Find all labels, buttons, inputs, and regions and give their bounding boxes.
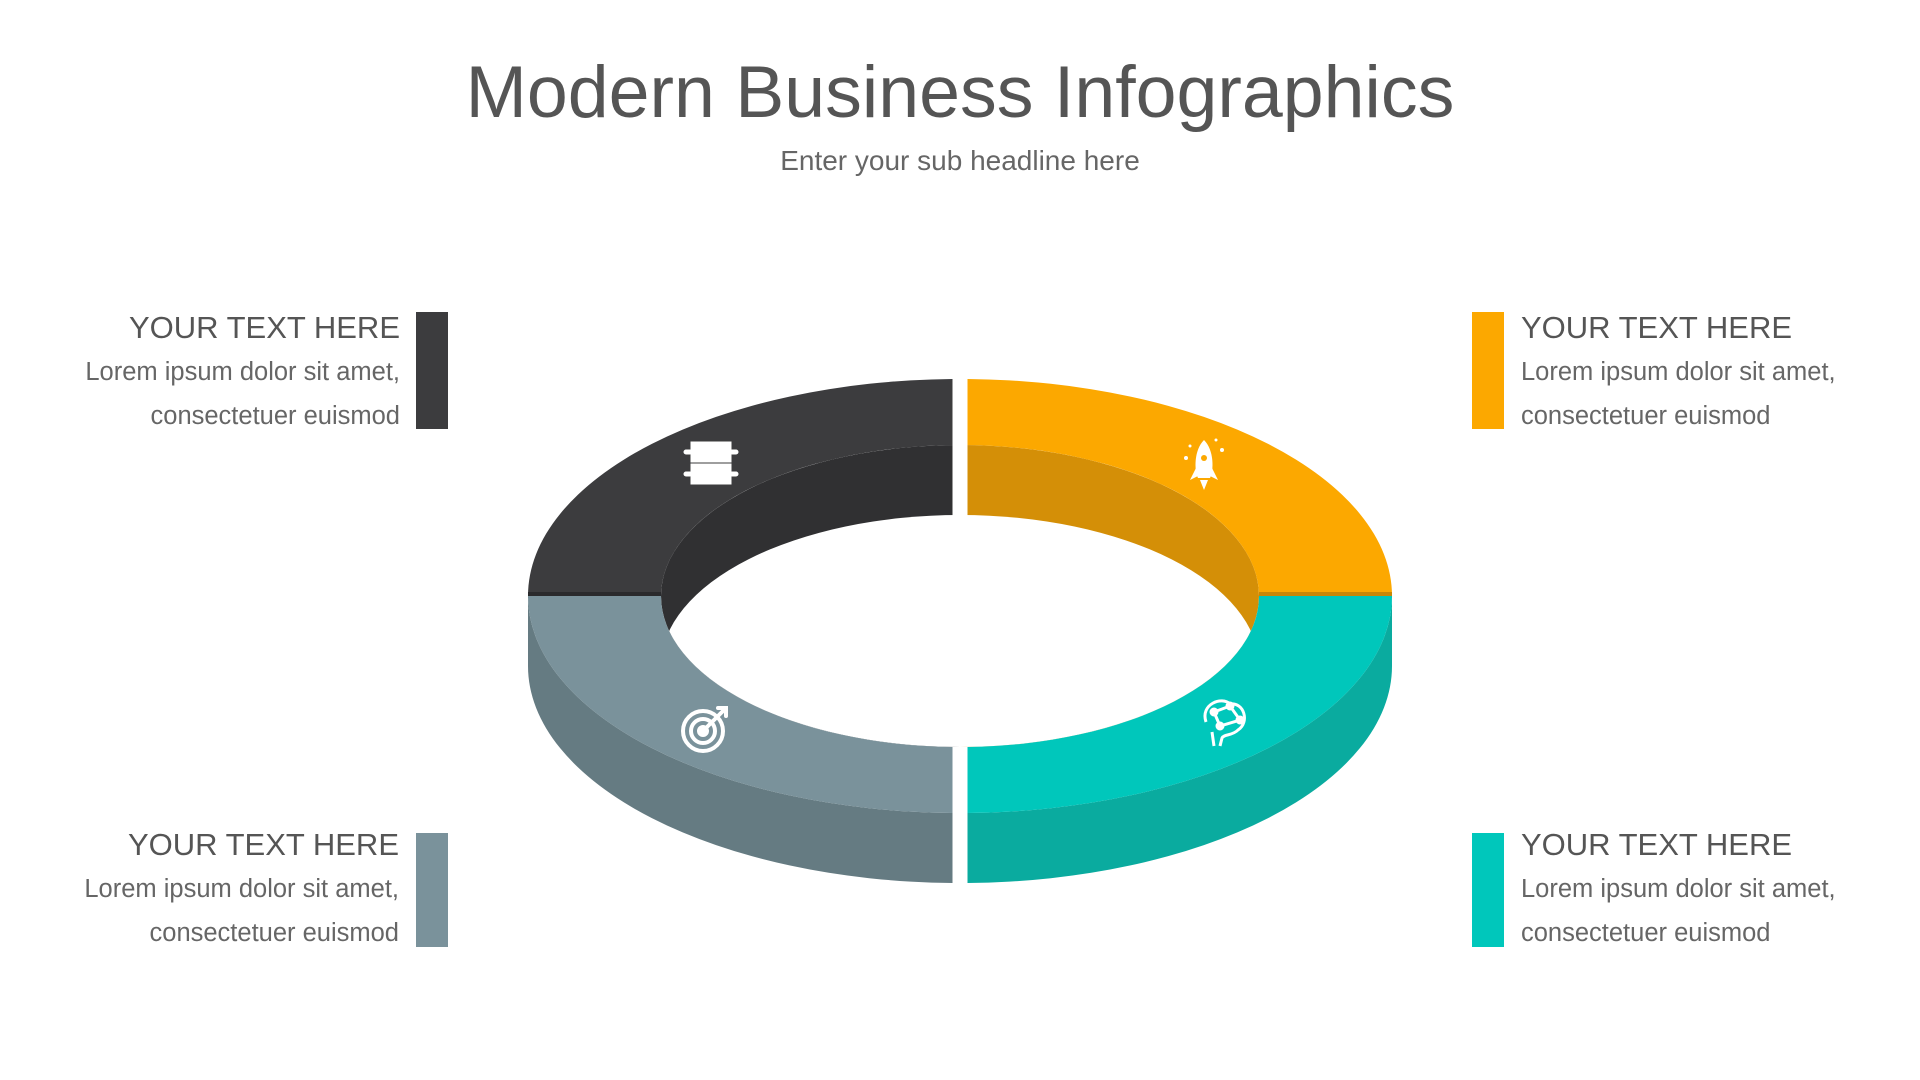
text block: bottom-right: Lorem ipsum dolor sit amet,	[1521, 875, 1836, 903]
text block: bottom-right: consectetuer euismod	[1521, 919, 1770, 947]
title: Modern Business Infographics	[466, 50, 1454, 133]
segment: upper-left dark	[528, 379, 952, 596]
segment: lower-right teal	[968, 596, 1392, 883]
text block: top-left	[85, 310, 400, 430]
text block: top-right	[1521, 310, 1836, 430]
text block: top-left: Lorem ipsum dolor sit amet,	[85, 358, 400, 386]
text block: top-right: YOUR TEXT HERE	[1521, 310, 1792, 345]
segment: upper-right orange	[968, 379, 1392, 596]
ring chart	[528, 379, 1392, 883]
bar: top-right orange	[1472, 312, 1504, 429]
segment: lower-left gray	[528, 596, 952, 883]
text block: top-left: YOUR TEXT HERE	[129, 310, 400, 345]
text block: bottom-right	[1521, 827, 1836, 947]
text block: top-left: consectetuer euismod	[151, 402, 400, 430]
bar: top-left dark	[416, 312, 448, 429]
text block: top-right: consectetuer euismod	[1521, 402, 1770, 430]
bar: bottom-left gray	[416, 833, 448, 947]
text block: bottom-right: YOUR TEXT HERE	[1521, 827, 1792, 862]
text block: bottom-left: Lorem ipsum dolor sit amet,	[84, 875, 399, 903]
text block: bottom-left: consectetuer euismod	[150, 919, 399, 947]
text block: bottom-left: YOUR TEXT HERE	[128, 827, 399, 862]
bar: bottom-right teal	[1472, 833, 1504, 947]
text block: bottom-left	[84, 827, 399, 947]
text block: top-right: Lorem ipsum dolor sit amet,	[1521, 358, 1836, 386]
subtitle: Enter your sub headline here	[780, 145, 1140, 176]
icon: hands	[686, 444, 736, 482]
icon: brain	[1205, 701, 1244, 746]
inner walls	[661, 445, 1259, 747]
icon: target	[683, 708, 726, 751]
icon: rocket	[1184, 438, 1224, 490]
